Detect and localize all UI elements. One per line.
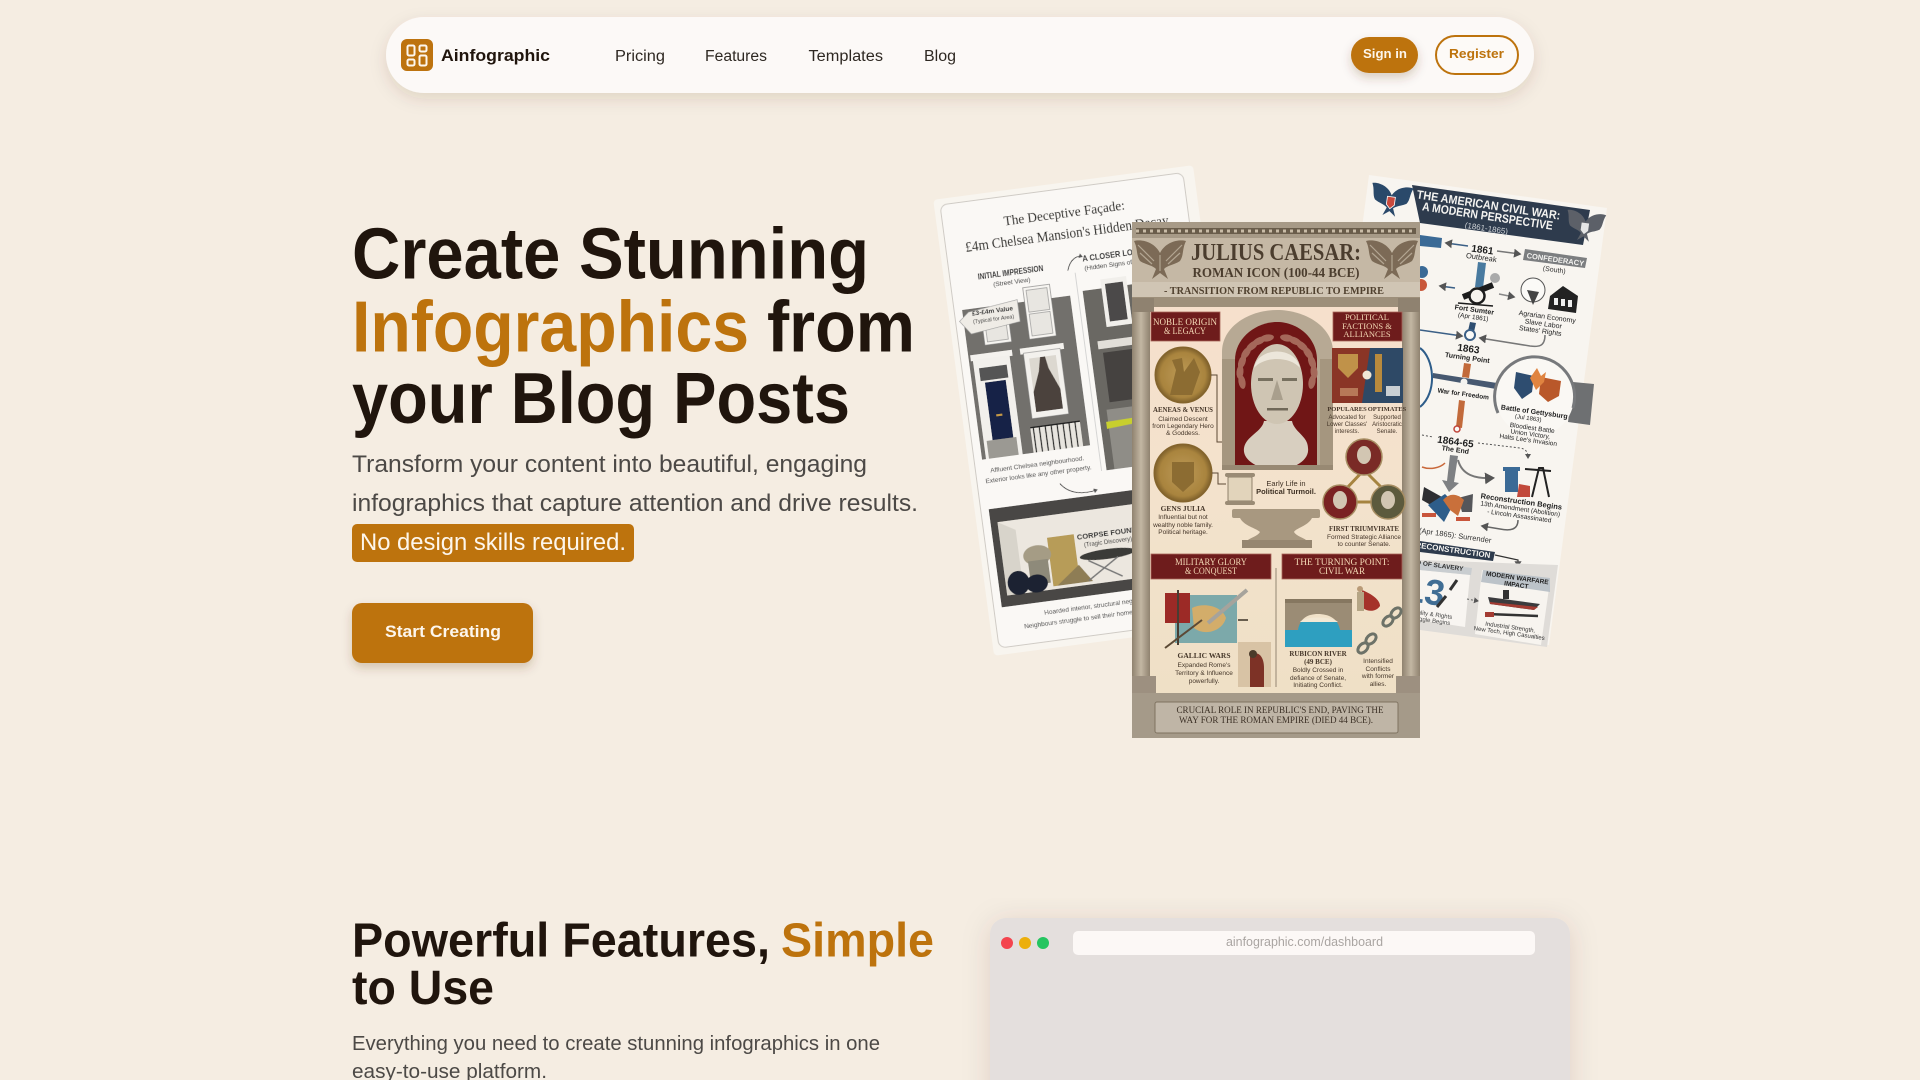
header: turning point (1282, 554, 1402, 579)
label: gallic wars: Expanded Rome's (1178, 662, 1231, 669)
timeline 1863: 1863 (1457, 343, 1481, 357)
label: rubicon river (1289, 650, 1348, 689)
timeline 1864-65 (1422, 400, 1528, 492)
poster title (1132, 238, 1420, 282)
caption: interior: Hoarded interior, structural neglect. (1044, 596, 1145, 617)
label: reconstruction begins: 13th Amendment (Abolition) (1480, 500, 1560, 519)
interior scene (989, 481, 1215, 607)
panels: legacy (1402, 558, 1558, 647)
icon: reconstruction (1503, 467, 1551, 497)
header: noble origin: NOBLE ORIGIN (1153, 317, 1217, 327)
base plaque (1132, 693, 1420, 738)
features heading: Powerful Features, (352, 914, 770, 968)
label: fort sumter (1454, 304, 1495, 323)
coin: gens julia: Political heritage. (1158, 529, 1208, 536)
label: surrender: Appomattox (Apr 1865): Surrender (1377, 520, 1492, 545)
arrow: to discovery (1060, 479, 1097, 496)
legacy banner: LEGACY & RECONSTRUCTION (1372, 535, 1491, 560)
features heading (352, 914, 934, 1015)
hero heading: from (767, 288, 915, 368)
label: agrarian economy (1518, 310, 1577, 338)
house facade: street view (960, 282, 1090, 460)
left column (1132, 298, 1156, 693)
nav links: Features (705, 48, 767, 65)
logo icon (401, 39, 433, 71)
caption: interior (1022, 596, 1147, 631)
poster title: JULIUS CAESAR: (1191, 240, 1361, 266)
card title: The Deceptive Façade: (1003, 199, 1126, 230)
bust (1236, 333, 1318, 470)
label: intensified conflicts (1361, 658, 1395, 688)
section labels: (Street View) (993, 277, 1031, 289)
illustration: soldier panel (1238, 642, 1271, 687)
icon: left eagle (1134, 240, 1186, 279)
timeline 1863: Turning Point (1444, 352, 1491, 365)
header: political factions: FACTIONS & (1342, 321, 1392, 331)
arch with bust of caesar (1222, 310, 1333, 470)
timeline 1861: 1861 (1471, 244, 1495, 258)
interior scene: (Tragic Discovery) (1084, 537, 1133, 549)
window controls (1001, 937, 1049, 949)
icon: cannon (1440, 273, 1514, 306)
battle of gettysburg circle (1495, 357, 1594, 448)
panel: end of slavery: 13 (1402, 568, 1448, 614)
icon: right eagle (1366, 240, 1418, 279)
features heading: Simple (781, 914, 934, 968)
poster subtitle band (1132, 282, 1420, 307)
text: populares and optimates (1327, 406, 1407, 435)
text: populares and optimates: POPULARES (1327, 406, 1367, 413)
header: political factions: POLITICAL (1345, 312, 1389, 322)
confederacy label: (South) (1542, 265, 1566, 276)
arrow: to closer look (1066, 256, 1084, 271)
caption: street view (984, 454, 1092, 485)
register button: Register (1449, 46, 1504, 61)
value tag (958, 300, 1021, 335)
icon: cotton and house (1521, 278, 1578, 313)
base plaque: WAY FOR THE ROMAN EMPIRE (DIED 44 BCE). (1179, 715, 1373, 726)
coin: gens julia (1152, 444, 1226, 536)
section labels: A CLOSER LOOK (1082, 245, 1145, 264)
first triumvirate medallions (1323, 439, 1405, 519)
label: fort sumter: Fort Sumter (1454, 304, 1495, 317)
hero heading: Create Stunning (352, 214, 869, 294)
battle of gettysburg circle: (Jul 1863) (1515, 414, 1542, 424)
caption: street view: Exterior looks like any other property. (985, 464, 1092, 485)
coin: gens julia: Influential but not (1158, 514, 1208, 521)
register button (1436, 36, 1518, 74)
panel: end of slavery: Struggle Begins (1408, 615, 1451, 627)
base plaque: CRUCIAL ROLE IN REPUBLIC'S END, PAVING THE (1176, 706, 1384, 716)
timeline 1864-65: The End (1441, 445, 1469, 456)
hero heading (352, 214, 915, 439)
label: agrarian economy: States' Rights (1518, 325, 1562, 338)
label: rubicon river: RUBICON RIVER (1289, 650, 1348, 658)
text: populares and optimates: OPTIMATES (1368, 406, 1407, 413)
illustration: broken chain (1356, 606, 1403, 655)
sign in button (1351, 37, 1418, 73)
label: rubicon river: defiance of Senate, (1290, 675, 1346, 682)
gears peeking behind (1416, 266, 1428, 278)
label: intensified conflicts: allies. (1370, 681, 1386, 688)
header: noble origin: & LEGACY (1164, 326, 1206, 336)
illustration: rubicon bridge (1285, 599, 1352, 647)
label: first triumvirate: to counter Senate. (1337, 541, 1391, 548)
address bar: ainfographic.com/dashboard (1226, 935, 1383, 949)
panel: end of slavery (1402, 558, 1472, 627)
card title banner: THE AMERICAN CIVIL WAR: (1416, 187, 1561, 223)
card title banner: A MODERN PERSPECTIVE (1421, 199, 1554, 233)
panel: modern warfare impact: New Tech, High Casualties (1473, 626, 1545, 642)
label: rubicon river: Boldly Crossed in (1293, 667, 1344, 674)
label: rubicon river: (49 BCE) (1304, 658, 1333, 666)
legacy banner (1372, 535, 1518, 566)
coin: aeneas and venus: AENEAS & VENUS (1153, 405, 1213, 414)
pedestal (1232, 509, 1320, 548)
hero heading: Infographics (352, 288, 749, 368)
label: fort sumter: (Apr 1861) (1458, 312, 1489, 323)
coin: aeneas and venus: & Goddess. (1166, 430, 1200, 437)
call to action button: Start Creating (385, 622, 501, 641)
interior scene: CORPSE FOUND (1076, 525, 1138, 542)
battle of gettysburg circle: Bloodiest Battle (1509, 422, 1555, 435)
features heading: to Use (352, 962, 494, 1015)
card title banner (1412, 185, 1590, 245)
text: populares and optimates: interests. (1335, 429, 1360, 435)
label: rubicon river: Initiating Conflict. (1293, 682, 1343, 689)
call to action button (352, 603, 533, 663)
icon: scroll (1225, 473, 1255, 505)
highlight chip (352, 524, 634, 562)
label: intensified conflicts: Intensified (1363, 658, 1393, 665)
features description: Everything you need to create stunning infographics in one (352, 1033, 880, 1055)
battle of gettysburg circle: Halts Lee's Invasion (1499, 433, 1558, 448)
battle of gettysburg circle: Union Victory, (1510, 428, 1551, 441)
panel: modern warfare impact: IMPACT (1504, 580, 1529, 591)
label: gallic wars: powerfully. (1189, 678, 1219, 685)
coin: aeneas and venus (1152, 347, 1222, 442)
infographic card: american civil war (1311, 175, 1607, 647)
label: reconstruction begins: - Lincoln Assassinated (1487, 509, 1552, 525)
arrow: return to surrender (1482, 520, 1518, 530)
poster title: ROMAN ICON (100-44 BCE) (1192, 266, 1360, 281)
hero description (352, 451, 918, 517)
header: military glory: & CONQUEST (1185, 567, 1237, 577)
section labels (977, 244, 1155, 291)
caption: interior: Neighbours struggle to sell their homes. (1024, 608, 1138, 631)
confederacy label (1523, 249, 1587, 276)
infographic card: deceptive facade (933, 165, 1254, 656)
coin: gens julia: wealthy noble family. (1152, 522, 1213, 529)
dashboard browser mockup (990, 918, 1570, 1080)
label: gallic wars: Territory & Influence (1175, 670, 1233, 677)
sign in button: Sign in (1363, 46, 1407, 61)
header: military glory (1151, 554, 1271, 579)
confederacy label: CONFEDERACY (1526, 251, 1585, 268)
coin: aeneas and venus: from Legendary Hero (1152, 423, 1214, 430)
icon: handshake (1422, 487, 1473, 522)
coin: gens julia: GENS JULIA (1161, 504, 1206, 513)
brand name: Ainfographic (441, 46, 550, 65)
label: gallic wars (1175, 651, 1233, 685)
caption: street view: Affluent Chelsea neighbourhood. (990, 455, 1085, 475)
header: turning point: THE TURNING POINT: (1294, 558, 1390, 568)
card title: £4m Chelsea Mansion's Hidden Decay (964, 213, 1170, 256)
panel: end of slavery: END OF SLAVERY (1407, 558, 1464, 573)
infographic poster: julius caesar (1132, 222, 1420, 738)
panel: modern warfare impact: MODERN WARFARE (1485, 571, 1550, 586)
panel: end of slavery: Equality & Rights (1406, 609, 1453, 621)
nav links: Templates (808, 48, 883, 65)
label: intensified conflicts: with former (1361, 673, 1395, 680)
label: early life: Early Life in (1266, 479, 1306, 488)
label: reconstruction begins (1480, 491, 1563, 525)
text: populares and optimates: Supported (1373, 415, 1401, 421)
navigation bar (386, 17, 1534, 93)
label: gallic wars: GALLIC WARS (1177, 651, 1231, 660)
section labels: (Hidden Signs of Decay) (1084, 256, 1155, 272)
timeline 1861 (1420, 235, 1520, 288)
hero description: infographics that capture attention and drive results. (352, 490, 918, 517)
text: populares and optimates: Senate. (1377, 429, 1398, 435)
label: reconstruction begins: Reconstruction Begins (1480, 491, 1563, 512)
timeline 1861: Outbreak (1465, 251, 1497, 264)
section labels: INITIAL IMPRESSION (977, 263, 1044, 282)
coin: aeneas and venus: Claimed Descent (1158, 416, 1208, 423)
panel: modern warfare impact: Industrial Strength, (1485, 622, 1536, 635)
text: populares and optimates: Lower Classes' (1327, 422, 1367, 428)
header: noble origin (1151, 312, 1220, 341)
card title banner: (1861-1865) (1464, 221, 1509, 236)
card title (962, 193, 1170, 256)
nav links: Pricing (615, 48, 665, 65)
frieze (1132, 222, 1420, 238)
label: agrarian economy: Slave Labor (1524, 318, 1563, 331)
timeline 1864-65: 1864-65 (1436, 435, 1475, 451)
timeline 1863 (1420, 322, 1545, 407)
text: populares and optimates: Aristocratic (1372, 422, 1402, 428)
label: agrarian economy: Agrarian Economy (1518, 310, 1577, 325)
label: first triumvirate: FIRST TRIUMVIRATE (1329, 524, 1399, 533)
header: military glory: MILITARY GLORY (1175, 558, 1247, 568)
label: early life (1256, 479, 1316, 496)
value tag: (Typical for Area) (973, 314, 1015, 326)
nav links (615, 48, 956, 65)
address bar (1073, 931, 1535, 955)
illustration: caesar figure (1357, 586, 1380, 611)
poster subtitle band: - TRANSITION FROM REPUBLIC TO EMPIRE (1164, 285, 1384, 297)
label: intensified conflicts: Conflicts (1366, 666, 1391, 673)
icon: grey eagle (1564, 209, 1606, 244)
header: political factions: ALLIANCES (1343, 329, 1391, 339)
label: early life: Political Turmoil. (1256, 487, 1316, 496)
value tag: £3-£4m Value (972, 305, 1014, 318)
highlight chip: No design skills required. (360, 529, 626, 556)
timeline 1863: War for Freedom (1437, 387, 1490, 402)
parchment interior (1150, 307, 1402, 693)
right column (1396, 298, 1420, 693)
header: turning point: CIVIL WAR (1319, 567, 1366, 577)
text: populares and optimates: Advocated for (1328, 415, 1366, 421)
panel: modern warfare impact (1473, 570, 1550, 645)
house facade: closer look (1075, 261, 1186, 471)
hero description: Transform your content into beautiful, engaging (352, 451, 867, 478)
illustration: gallic wars map (1165, 590, 1248, 648)
header: political factions (1333, 312, 1402, 341)
battle of gettysburg circle: Battle of Gettysburg (1500, 404, 1568, 421)
hero heading: your Blog Posts (352, 359, 850, 439)
icon: blue eagle (1368, 182, 1414, 219)
label: first triumvirate: Formed Strategic Alliance (1327, 534, 1401, 541)
populares vs optimates panel (1332, 348, 1403, 403)
features description (352, 1033, 880, 1080)
label: first triumvirate (1327, 524, 1401, 548)
nav links: Blog (924, 48, 956, 65)
